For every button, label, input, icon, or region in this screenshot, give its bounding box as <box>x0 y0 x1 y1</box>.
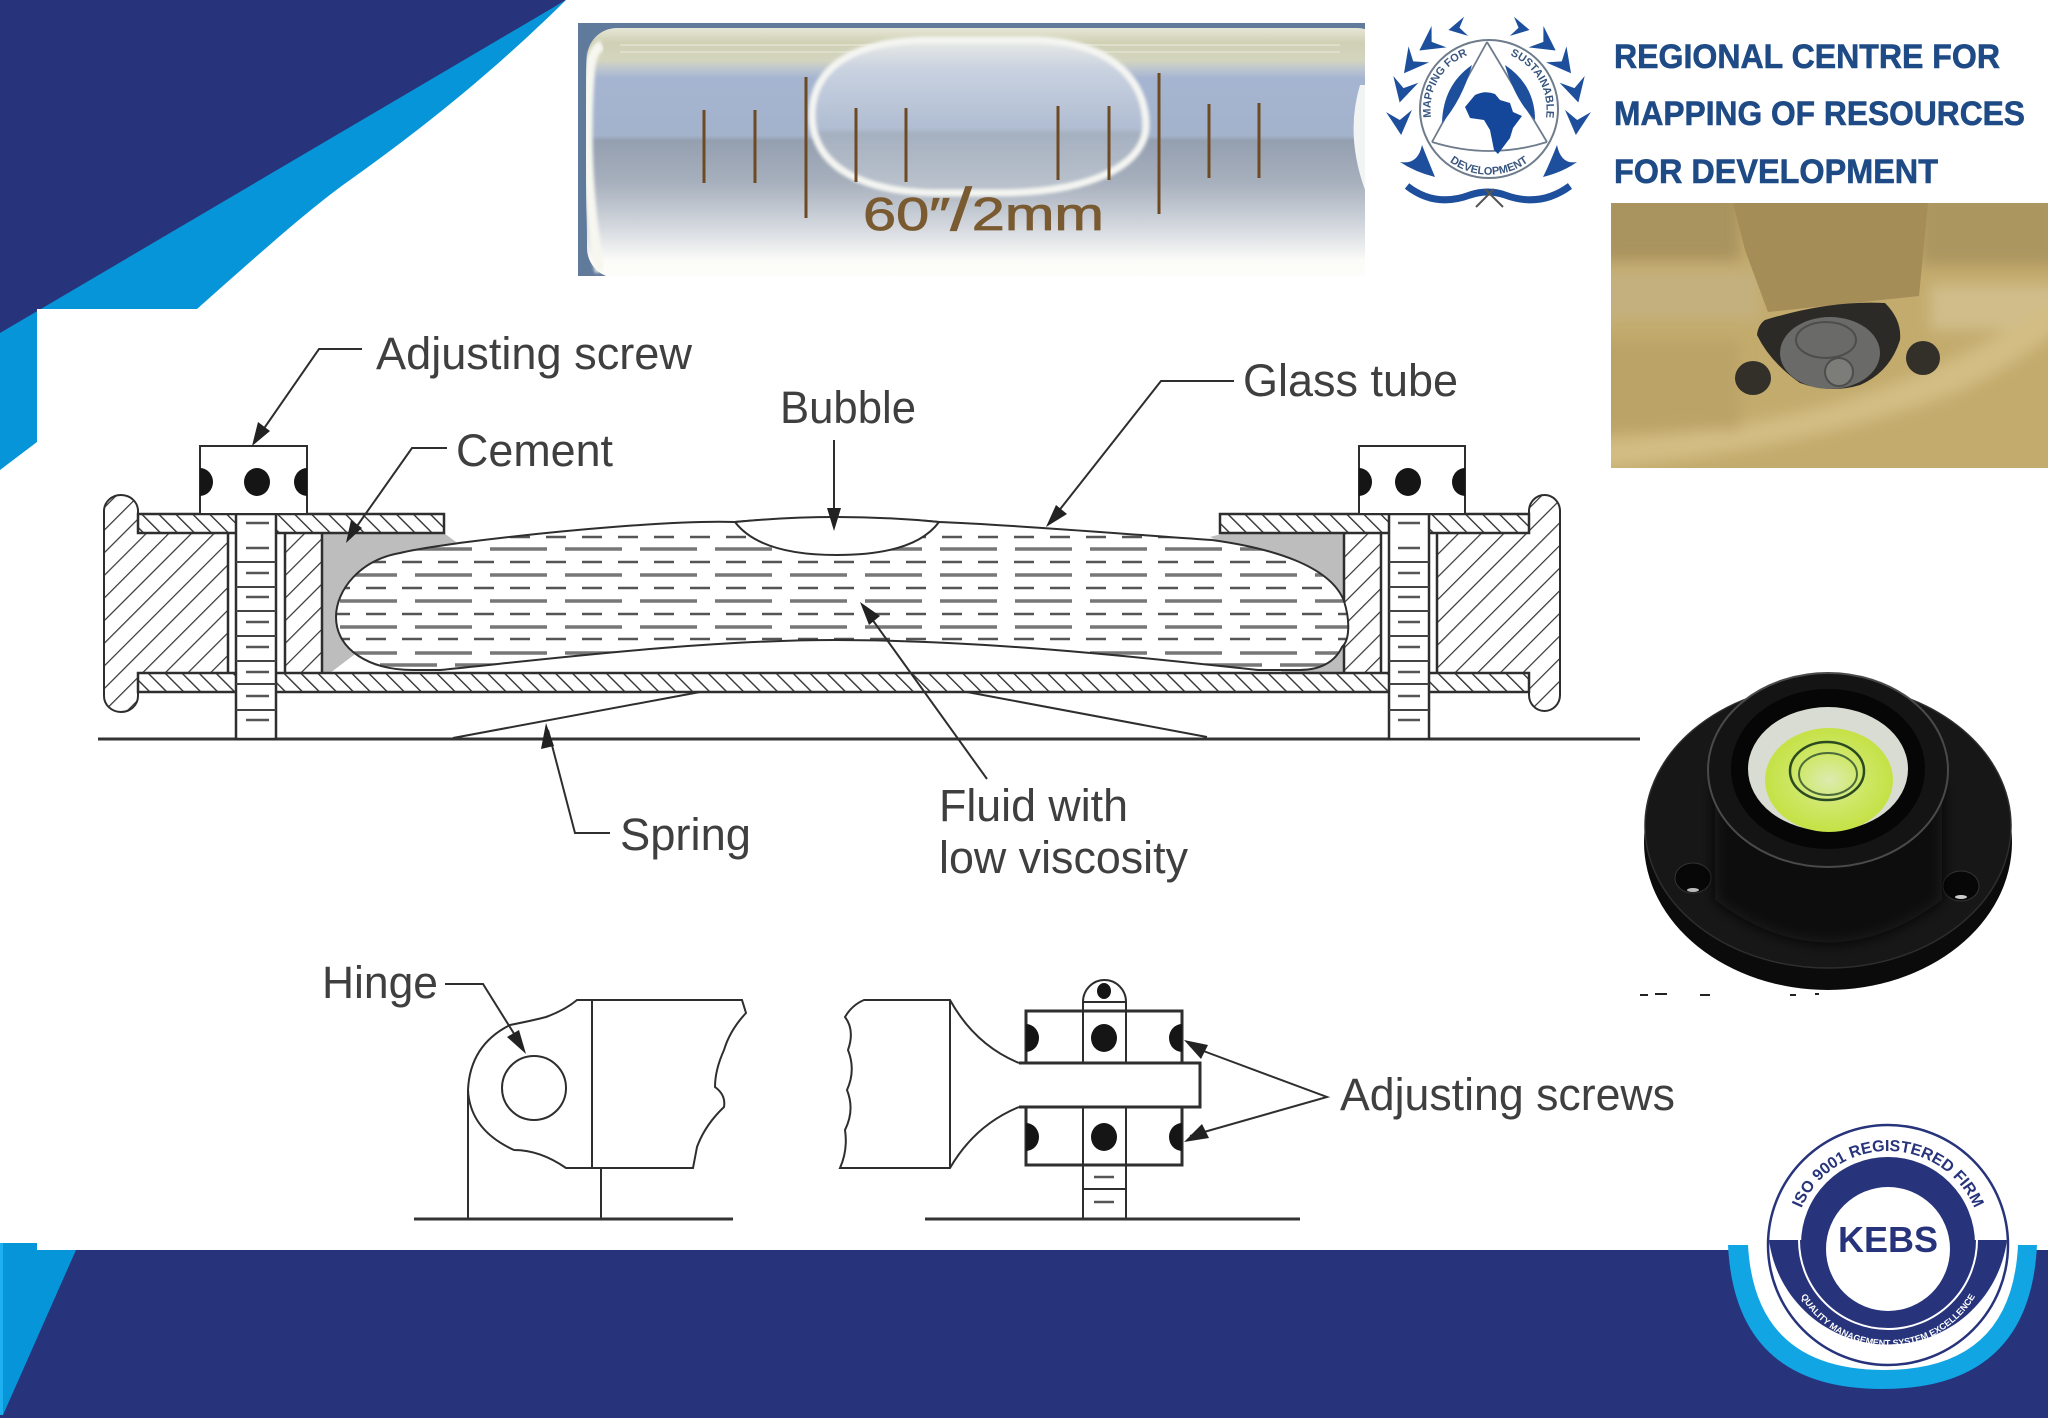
label: Bubble: Bubble <box>780 382 916 433</box>
label: Bubble <box>780 382 916 531</box>
label: Adjusting screws: Adjusting screws <box>1340 1069 1675 1120</box>
graduation ticks <box>704 73 1259 218</box>
vial marking: 60″ /2mm <box>863 176 1104 243</box>
label: Hinge: Hinge <box>322 957 438 1008</box>
levelling screws <box>1735 361 1771 395</box>
label: Glass tube <box>1046 355 1458 527</box>
spring <box>453 692 1207 738</box>
bubble housing <box>1757 303 1900 389</box>
footer band <box>0 1243 2048 1418</box>
label: Fluid with low viscosity <box>860 602 1188 883</box>
bubble <box>735 517 939 555</box>
panel: white diagram area <box>37 309 1817 1250</box>
Africa map <box>1465 92 1522 154</box>
left end cap <box>104 495 138 712</box>
right screw head <box>1359 446 1465 514</box>
background: top-left corner shapes <box>0 0 566 470</box>
mounting holes <box>1675 863 1711 893</box>
block edges <box>228 533 1437 673</box>
right adjusting screw <box>1389 514 1429 739</box>
logo: regional centre emblem: MAPPING FOR <box>1422 49 1468 118</box>
lower left diagram: hinge <box>414 1000 746 1219</box>
label: Spring <box>541 723 751 860</box>
badge: KEBS ISO 9001: KEBS <box>1838 1219 1938 1260</box>
badge: KEBS ISO 9001 <box>1728 1124 2037 1389</box>
logo: regional centre emblem <box>1386 16 1591 208</box>
label: Adjusting screw <box>252 328 692 446</box>
organisation name: FOR DEVELOPMENT <box>1614 153 1938 191</box>
window <box>1748 707 1908 831</box>
label: Adjusting screw: Adjusting screw <box>376 328 692 379</box>
glass tube with fluid <box>330 518 1350 670</box>
left adjusting screw <box>236 514 276 739</box>
hatched plates <box>138 514 1529 692</box>
label: Adjusting screws <box>1184 1040 1675 1142</box>
logo: regional centre emblem: SUSTAINABLE <box>1511 49 1554 118</box>
badge: KEBS ISO 9001: QUALITY MANAGEMENT SYSTEM EXCELLENCE <box>1802 1294 1975 1344</box>
label: Fluid with low viscosity: Fluid with <box>939 780 1128 831</box>
photo: circular bubble on instrument base <box>1600 190 2048 468</box>
organisation name: REGIONAL CENTRE FOR <box>1614 38 2000 76</box>
right end cap <box>1529 495 1560 711</box>
photo: black circular spirit level <box>1644 673 2012 990</box>
white arc <box>1748 1245 2018 1370</box>
organisation name <box>1614 38 2025 191</box>
logo: regional centre emblem: DEVELOPMENT <box>1450 156 1526 175</box>
bubble in vial <box>812 40 1146 193</box>
label: Hinge <box>322 957 526 1054</box>
photo: glass vial with graduations <box>578 23 1387 278</box>
vertical bolt <box>1083 980 1126 1218</box>
outer cyan arc <box>1728 1245 2037 1389</box>
cement fill <box>323 533 1344 673</box>
label: Fluid with low viscosity: low viscosity <box>939 832 1188 883</box>
tongue <box>1019 1063 1200 1107</box>
scan artifact under level photo <box>1640 994 1819 995</box>
screw blocks <box>1026 1011 1182 1165</box>
wreath <box>1386 17 1591 207</box>
label: Cement: Cement <box>456 425 613 476</box>
left screw head <box>200 446 307 514</box>
hinge pin <box>502 1056 566 1120</box>
housing <box>1715 780 1942 942</box>
seal <box>1768 1125 2008 1365</box>
lower right diagram: adjusting screws <box>840 980 1300 1219</box>
label: Cement <box>346 425 613 543</box>
main diagram: tube level cross-section <box>98 446 1640 739</box>
organisation name: MAPPING OF RESOURCES <box>1614 95 2025 133</box>
hatched blocks <box>138 533 1529 673</box>
label: Spring: Spring <box>620 809 751 860</box>
badge: KEBS ISO 9001: ISO 9001 REGISTERED FIRM <box>1792 1140 1984 1208</box>
label: Glass tube: Glass tube <box>1243 355 1458 406</box>
ground line <box>98 738 1640 740</box>
